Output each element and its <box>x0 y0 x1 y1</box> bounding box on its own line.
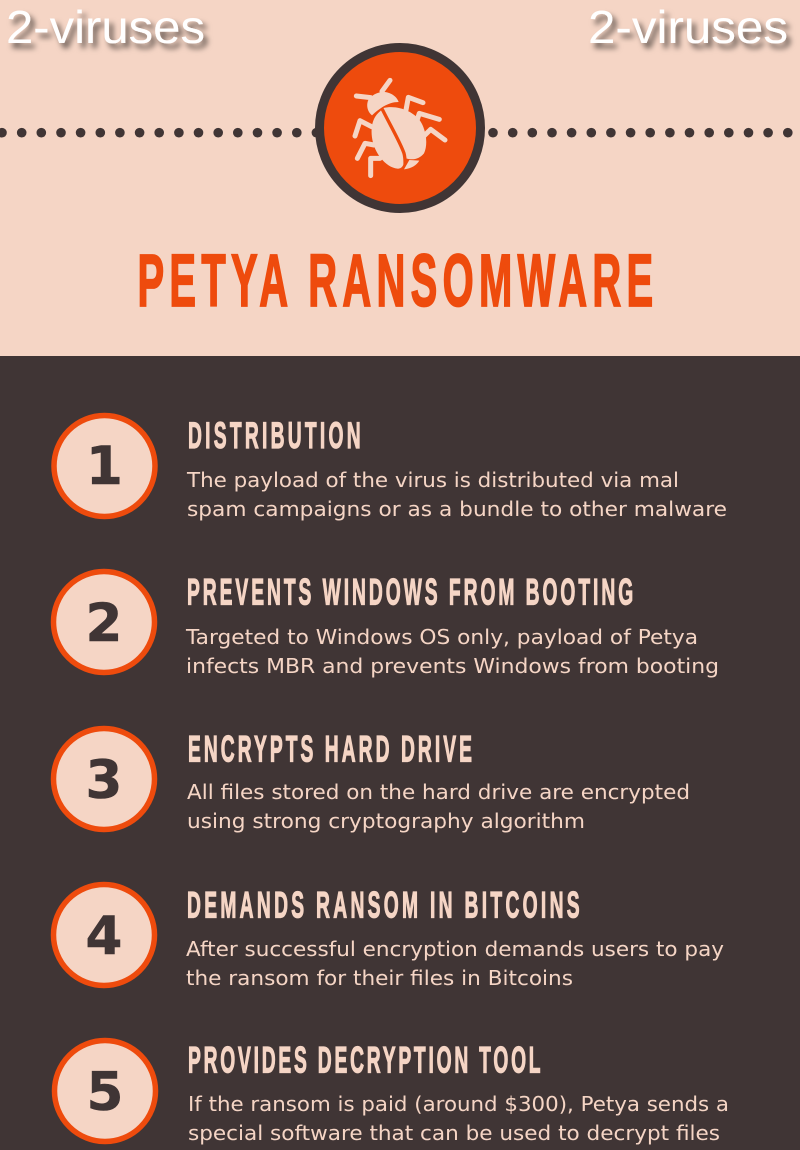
heading 4: DEMANDS RANSOM IN BITCOINS <box>187 885 580 926</box>
step 5 <box>54 1040 729 1145</box>
description 4 <box>186 937 724 990</box>
dotted line right <box>488 128 793 138</box>
number badge 5: 5 <box>87 1062 123 1123</box>
title: PETYA RANSOMWARE <box>138 239 653 322</box>
number badge 1: 1 <box>86 436 123 497</box>
watermark left: 2-viruses <box>6 1 205 53</box>
description 1: spam campaigns or as a bundle to other malware <box>187 497 727 521</box>
description 5: special software that can be used to decrypt files <box>188 1121 720 1145</box>
number badge 1 <box>54 416 155 516</box>
number badge 4: 4 <box>86 906 122 967</box>
number badge 3: 3 <box>86 750 122 811</box>
description 2: Targeted to Windows OS only, payload of Petya <box>185 625 698 649</box>
description 1: The payload of the virus is distributed via mal <box>186 468 679 492</box>
heading 3: ENCRYPTS HARD DRIVE <box>188 729 472 770</box>
number badge 2 <box>54 572 154 672</box>
number badge 4 <box>54 884 154 986</box>
description 5 <box>188 1092 729 1145</box>
step 4 <box>54 884 724 990</box>
description 3: using strong cryptography algorithm <box>187 809 585 833</box>
heading 1: DISTRIBUTION <box>188 415 361 457</box>
step 3 <box>54 728 690 833</box>
step 1 <box>54 415 727 521</box>
icon: bug in circle <box>320 48 480 208</box>
description 2 <box>185 625 719 678</box>
number badge 5 <box>54 1040 156 1142</box>
panel: header background <box>0 0 800 356</box>
description 4: After successful encryption demands users to pay <box>186 937 724 961</box>
number badge 3 <box>54 728 154 830</box>
watermark right: 2-viruses <box>588 1 788 53</box>
heading 5: PROVIDES DECRYPTION TOOL <box>188 1040 541 1081</box>
description 5: If the ransom is paid (around $300), Petya sends a <box>188 1092 729 1116</box>
heading 2: PREVENTS WINDOWS FROM BOOTING <box>187 572 633 613</box>
description 1 <box>186 468 727 521</box>
description 2: infects MBR and prevents Windows from booting <box>186 654 719 678</box>
description 3: All files stored on the hard drive are encrypted <box>187 780 690 804</box>
dotted line left <box>0 128 321 138</box>
number badge 2: 2 <box>86 593 122 654</box>
step 2 <box>54 572 719 678</box>
description 4: the ransom for their files in Bitcoins <box>186 966 573 990</box>
panel: dark content background <box>0 356 800 1150</box>
description 3 <box>187 780 690 833</box>
